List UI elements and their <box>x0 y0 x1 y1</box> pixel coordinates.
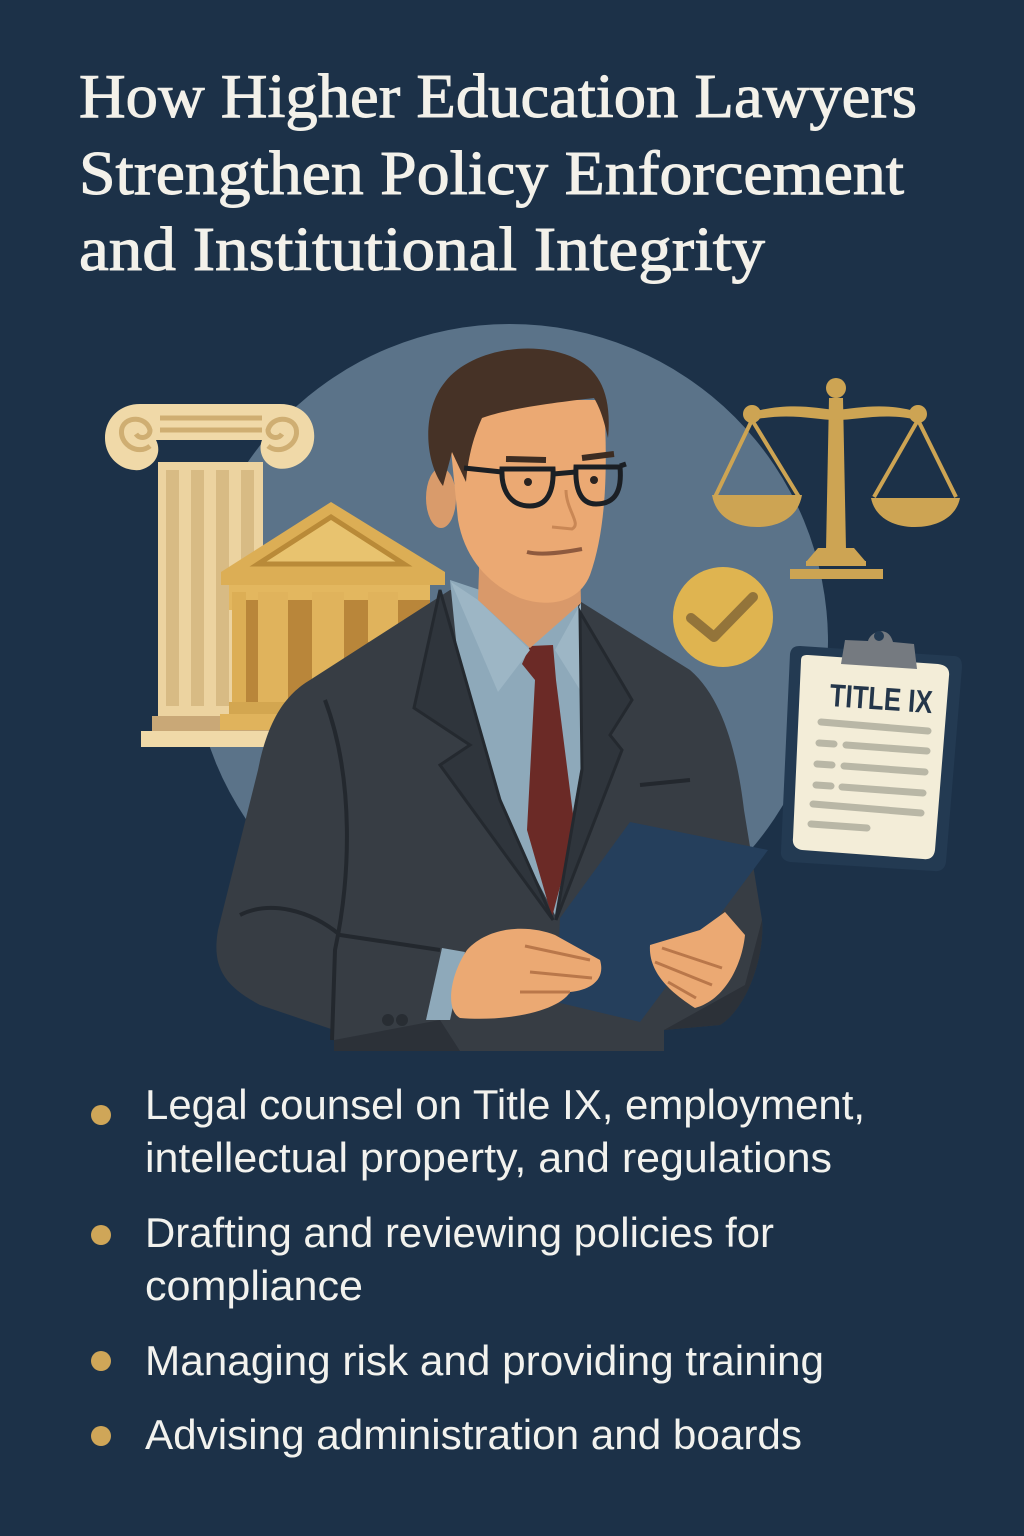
bullet 2: compliance <box>145 1262 363 1309</box>
collar <box>451 582 530 692</box>
nose and mouth <box>552 490 575 529</box>
shirt <box>450 580 582 915</box>
neck <box>478 540 581 648</box>
bullet 1: Legal counsel on Title IX, employment, <box>145 1081 865 1128</box>
title: How Higher Education Lawyers <box>79 63 917 131</box>
jacket lower shading <box>334 920 762 1051</box>
left hand <box>451 929 601 1019</box>
bullet list <box>91 1081 865 1458</box>
title: and Institutional Integrity <box>79 216 765 284</box>
jacket shadow lines <box>240 700 690 1040</box>
icon: check badge <box>673 567 773 667</box>
icon: courthouse <box>220 502 445 730</box>
jacket <box>216 590 762 1051</box>
title <box>79 63 917 284</box>
bullet 4: Advising administration and boards <box>145 1411 802 1458</box>
lapels <box>414 590 553 920</box>
icon: scales of justice <box>712 378 960 579</box>
brows and eyes <box>506 454 614 460</box>
cuff <box>426 948 465 1020</box>
right hand <box>650 912 745 1008</box>
hair <box>428 348 609 486</box>
face <box>451 400 606 603</box>
glasses <box>464 464 626 506</box>
icon: Title IX clipboard: TITLE IX <box>829 677 934 720</box>
tie <box>522 645 575 917</box>
icon: Title IX clipboard <box>781 631 962 871</box>
bullet 3: Managing risk and providing training <box>145 1337 824 1384</box>
bullet 2: Drafting and reviewing policies for <box>145 1209 774 1256</box>
folder <box>556 822 768 1022</box>
illustration backdrop circle <box>192 324 828 960</box>
bullet 1: intellectual property, and regulations <box>145 1134 832 1181</box>
ear <box>426 468 456 528</box>
bullet 1 <box>91 1081 865 1181</box>
bullet 2 <box>91 1209 774 1309</box>
lawyer figure <box>216 348 768 1051</box>
title: Strengthen Policy Enforcement <box>79 140 904 208</box>
jacket buttons <box>382 1014 394 1026</box>
icon: ionic column <box>105 404 314 747</box>
